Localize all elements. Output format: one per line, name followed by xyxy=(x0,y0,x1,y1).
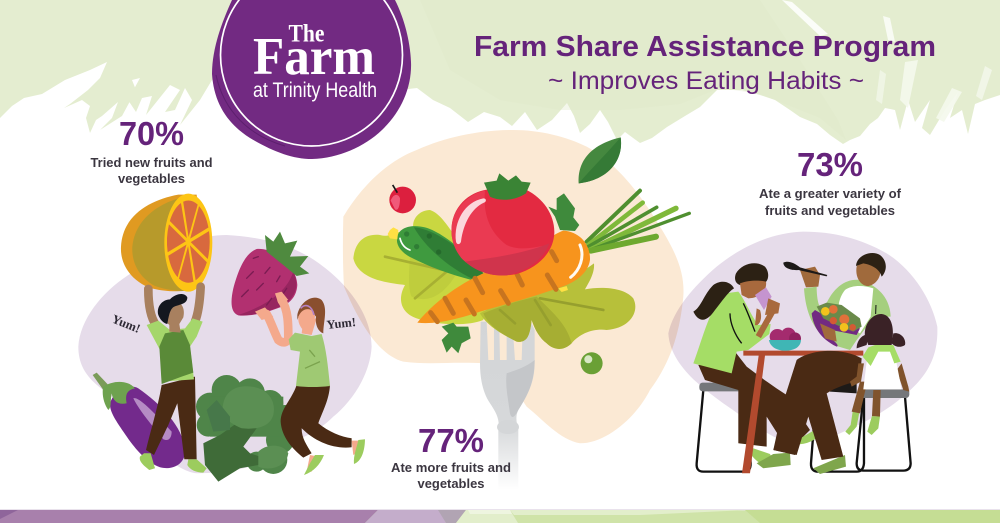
logo: The Farm at Trinity Health: The xyxy=(288,20,324,48)
illustration: family eating at table xyxy=(693,253,911,474)
shirt xyxy=(289,333,330,387)
salad bowl xyxy=(812,310,860,347)
logo: The Farm at Trinity Health: at Trinity Health xyxy=(253,79,377,102)
vest xyxy=(159,330,193,384)
lettuce right xyxy=(480,263,635,349)
man xyxy=(813,455,846,474)
illustration: broccoli xyxy=(196,375,300,482)
cucumber xyxy=(397,226,483,280)
woman xyxy=(748,447,775,463)
shoes xyxy=(140,453,155,470)
stools xyxy=(697,390,911,472)
illustration: woman holding strawberry xyxy=(255,292,365,475)
logo: The Farm at Trinity Health xyxy=(212,0,411,159)
arms xyxy=(148,289,156,325)
background blob: centre cream xyxy=(343,130,684,443)
shoes xyxy=(307,455,318,472)
illustration: man holding orange xyxy=(140,287,207,473)
shirt xyxy=(147,318,203,382)
footer colour band xyxy=(0,509,1000,523)
cherry xyxy=(389,187,416,213)
illustration: vegetables on the fork xyxy=(353,137,689,374)
stat: 70%: Tried new fruits and xyxy=(90,156,212,170)
stat: 70%: 70% xyxy=(119,115,184,152)
tomato xyxy=(451,189,554,275)
fruit bowl xyxy=(770,329,785,344)
parsley xyxy=(548,193,579,231)
stat: 70% xyxy=(90,115,212,186)
stat: 73% xyxy=(759,146,902,218)
head xyxy=(164,301,184,333)
leaf xyxy=(579,137,621,183)
logo: The Farm at Trinity Health: Farm xyxy=(253,28,375,86)
stat: 77%: vegetables xyxy=(418,477,485,491)
table xyxy=(742,351,863,473)
stat: 77%: 77% xyxy=(418,422,484,459)
painted green header background xyxy=(0,0,1000,144)
illustration: eggplant xyxy=(93,373,185,468)
pea xyxy=(581,352,603,374)
carrot greens xyxy=(587,191,640,242)
stat: 73%: Ate a greater variety of xyxy=(759,187,902,201)
head and hair xyxy=(302,318,317,335)
label: Yum! right: Yum! xyxy=(326,315,357,332)
lettuce left xyxy=(353,210,490,324)
stat: 70%: vegetables xyxy=(118,172,185,186)
arms xyxy=(267,300,288,342)
background blob: left lavender xyxy=(78,235,372,473)
stat: 77% xyxy=(391,422,511,491)
stat: 77%: Ate more fruits and xyxy=(391,461,511,475)
illustration: fork xyxy=(480,320,535,490)
carrot xyxy=(417,231,590,323)
pants xyxy=(146,377,197,459)
stat: 73%: fruits and vegetables xyxy=(765,204,895,218)
label: Yum! left: Yum! xyxy=(110,312,142,336)
title: Farm Share Assistance Program xyxy=(474,31,936,63)
illustration: strawberry xyxy=(232,232,309,316)
pants xyxy=(281,385,352,458)
stat: 73%: 73% xyxy=(797,146,863,183)
background blob: right lavender xyxy=(668,232,937,443)
illustration: orange half xyxy=(121,194,212,292)
subtitle: ~ Improves Eating Habits ~ xyxy=(548,67,864,95)
child xyxy=(845,412,859,435)
